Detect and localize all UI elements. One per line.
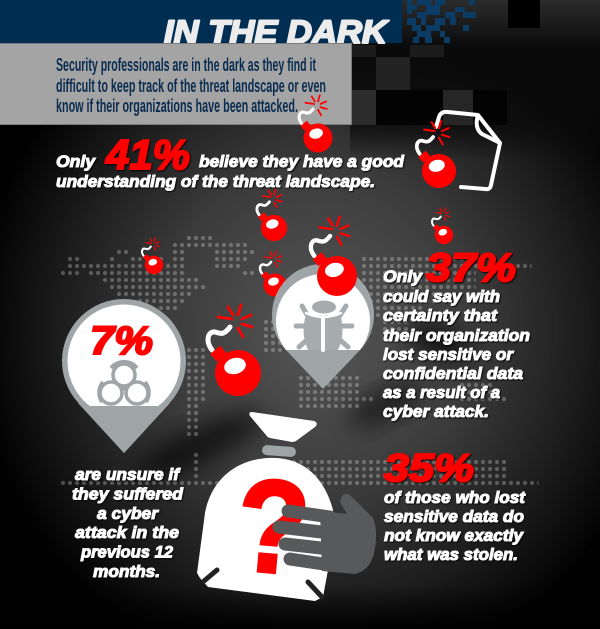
bomb: large [208, 305, 261, 396]
hand [279, 494, 376, 574]
stat: 37% [383, 246, 530, 421]
world map dots [61, 236, 538, 486]
stat: 37%: certainty that [383, 307, 499, 325]
text: 7% caption: are unsure if [75, 466, 181, 484]
stat: 35%: what was stolen. [384, 546, 518, 564]
stat: 35%: not know exactly [384, 527, 524, 545]
stat: 37%: 37% [426, 246, 516, 290]
text: 7% caption: months. [93, 563, 160, 581]
intro text: know if their organizations have been attacked. [56, 96, 298, 116]
stat: 41%: understanding of the threat landscape. [56, 173, 375, 191]
title: IN THE DARK [164, 14, 390, 50]
stat: 37%: as a result of a [383, 384, 500, 402]
stat: 37%: could say with [383, 288, 500, 306]
pin: bug [272, 264, 374, 389]
intro text: difficult to keep track of the threat landscape or even [56, 76, 326, 96]
intro text: Security professionals are in the dark as they find it [56, 55, 316, 75]
stat: 37%: lost sensitive or [383, 346, 515, 364]
stat: 41%: believe they have a good [199, 153, 405, 171]
stat: 37%: cyber attack. [383, 403, 489, 421]
text: 7% caption: they suffered [72, 486, 184, 504]
bomb: near intro [299, 95, 332, 152]
bomb: behind pin [260, 251, 286, 296]
text: 7% caption: attack in the [75, 524, 179, 542]
bomb: on bug pin [311, 217, 357, 296]
icon: document with bomb [417, 112, 500, 189]
7% value: 7% [90, 319, 153, 363]
pixel pattern [407, 0, 476, 43]
pin: 7% biohazard [62, 299, 186, 453]
stat: 35%: sensitive data do [384, 508, 524, 526]
text: 7% caption [72, 466, 184, 581]
stat: 41% [56, 131, 405, 191]
icon: money bag with question mark [197, 412, 376, 603]
text: 7% caption: a cyber [97, 505, 160, 523]
bomb: small right [432, 208, 453, 244]
stat: 37%: their organization [383, 327, 530, 345]
stat: 37%: Only [383, 268, 423, 286]
intro text [56, 55, 326, 116]
icon: bug [296, 300, 352, 350]
intro panel [0, 43, 352, 125]
stat: 41%: 41% [105, 131, 190, 178]
stat: 35%: 35% [384, 447, 474, 490]
stat: 41%: Only [56, 153, 96, 171]
bomb: small left [142, 238, 163, 274]
icon: biohazard [99, 362, 149, 404]
stat: 35%: of those who lost [384, 489, 527, 507]
text: 7% caption: previous 12 [80, 544, 173, 562]
bomb: top centre [257, 189, 287, 241]
stat: 35% [384, 447, 527, 564]
question mark: ? [231, 450, 315, 603]
header band [0, 0, 402, 43]
stat: 37%: confidential data [383, 365, 523, 383]
